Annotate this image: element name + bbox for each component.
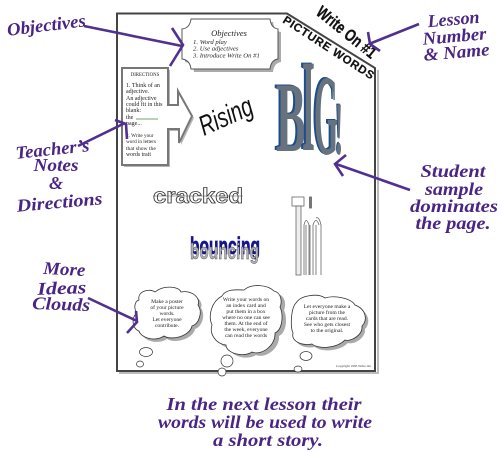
- directions callout arrow: An adjective: [126, 96, 157, 102]
- thought cloud 2: put them in a box: [226, 309, 266, 315]
- label: lesson number and name: Lesson: [426, 7, 480, 31]
- word art: Thin: [292, 197, 321, 275]
- objectives plaque: [182, 19, 281, 72]
- directions callout arrow: [122, 68, 194, 167]
- label: teachers notes and directions: Notes: [32, 155, 78, 175]
- word art: Rising: Rising: [194, 90, 258, 141]
- word art: cracked: cracked: [153, 185, 243, 208]
- thought cloud 1: Let everyone: [152, 317, 182, 323]
- word art: BIG!: G: [312, 53, 336, 179]
- label: lesson number and name: [421, 7, 490, 65]
- arrow: ideas clouds: [88, 298, 137, 333]
- label: more ideas clouds: [32, 258, 91, 315]
- thought cloud 1: contribute.: [155, 323, 180, 329]
- thought cloud 2: [210, 286, 286, 376]
- arrow: objectives: [84, 26, 183, 66]
- lesson title on diagonal: Write On #1: [312, 2, 380, 62]
- thought cloud 3: picture from the: [309, 309, 346, 316]
- label: lesson number and name: & Name: [423, 39, 490, 65]
- thought cloud 3: See who gets closest: [304, 322, 351, 328]
- thought cloud 3: [291, 295, 368, 372]
- word art: BIG!: B: [276, 62, 306, 173]
- label: student sample: sample: [424, 179, 483, 199]
- copyright note: Copyright 1995 Write On: [336, 364, 371, 368]
- thought cloud 2: an index card and: [226, 303, 266, 309]
- label: student sample: dominates: [410, 196, 498, 216]
- thought cloud 2: where no one can see: [222, 315, 270, 321]
- label: more ideas clouds: Ideas: [36, 277, 87, 299]
- closing note: [158, 394, 372, 450]
- directions callout arrow: page...: [126, 121, 142, 127]
- directions callout arrow: that show the: [126, 146, 156, 152]
- word art: BIG!: G: [314, 54, 338, 180]
- word art: BIG!: [274, 31, 343, 180]
- closing note: words will be used to write: [158, 412, 372, 432]
- word art: BIG!: I: [300, 31, 313, 178]
- directions callout arrow: 2. Write your: [126, 133, 154, 139]
- thought cloud 1: [133, 287, 203, 367]
- label: more ideas clouds: More: [42, 258, 86, 280]
- label: teachers notes and directions: Teacher’s: [15, 135, 90, 163]
- objectives plaque: 1. Word play: [193, 39, 227, 46]
- label: teachers notes and directions: &: [49, 173, 63, 193]
- directions callout arrow: adjective.: [126, 89, 150, 95]
- thought cloud 3: cards that are read.: [306, 316, 349, 322]
- word art: BIG!: B: [274, 61, 304, 172]
- arrow: teachers notes: [78, 120, 127, 146]
- label: teachers notes and directions: [15, 135, 103, 216]
- thought cloud 2: them. At the end of: [224, 320, 268, 327]
- label: student sample: the page.: [416, 213, 490, 233]
- thought cloud 2: can read the words: [225, 333, 267, 339]
- word art: BIG!: !: [335, 88, 343, 171]
- worksheet page: [117, 14, 378, 373]
- label: student sample: Student: [420, 161, 487, 181]
- directions callout arrow: word in letters: [126, 139, 156, 145]
- label: student sample: [410, 161, 498, 233]
- arrow: lesson number: [368, 24, 419, 51]
- objectives plaque: Objectives: [211, 28, 248, 38]
- word art: BIG!: !: [334, 87, 342, 170]
- label: teachers notes and directions: Directions: [15, 188, 103, 216]
- thought cloud 1: Make a poster: [151, 299, 183, 305]
- word art: BIG!: I: [302, 32, 315, 179]
- directions callout arrow: DIRECTIONS: [131, 73, 160, 78]
- thought cloud 2: the week, everyone: [224, 327, 268, 333]
- arrow: student sample: [335, 155, 410, 190]
- objectives plaque: 2. Use adjectives: [193, 46, 239, 52]
- thought cloud 2: Write your words on: [223, 297, 269, 303]
- label: lesson number and name: Number: [421, 23, 488, 49]
- directions callout arrow: the: [126, 115, 134, 121]
- word art: bouncing: bouncing: [190, 233, 260, 260]
- label: more ideas clouds: Clouds: [32, 293, 91, 315]
- label: Objectives: Objectives: [6, 10, 87, 40]
- directions callout arrow: 1. Think of an: [126, 82, 160, 89]
- closing note: a short story.: [213, 430, 323, 450]
- word art: bouncing: bouncing: [190, 239, 259, 264]
- thought cloud 1: words.: [159, 311, 175, 317]
- word art: bouncing: [190, 233, 260, 264]
- thought cloud 3: to the original.: [311, 328, 344, 334]
- lesson title on diagonal: PICTURE WORDS: [280, 14, 376, 82]
- directions callout arrow: could fit in this: [126, 101, 163, 108]
- thought cloud 1: of your picture: [150, 304, 184, 311]
- directions callout arrow: blank:: [126, 108, 141, 114]
- thought cloud 3: Let everyone make a: [304, 304, 351, 310]
- directions callout arrow: words trait: [126, 152, 151, 158]
- objectives plaque: 3. Introduce Write On #1: [192, 52, 260, 60]
- closing note: In the next lesson their: [165, 394, 363, 414]
